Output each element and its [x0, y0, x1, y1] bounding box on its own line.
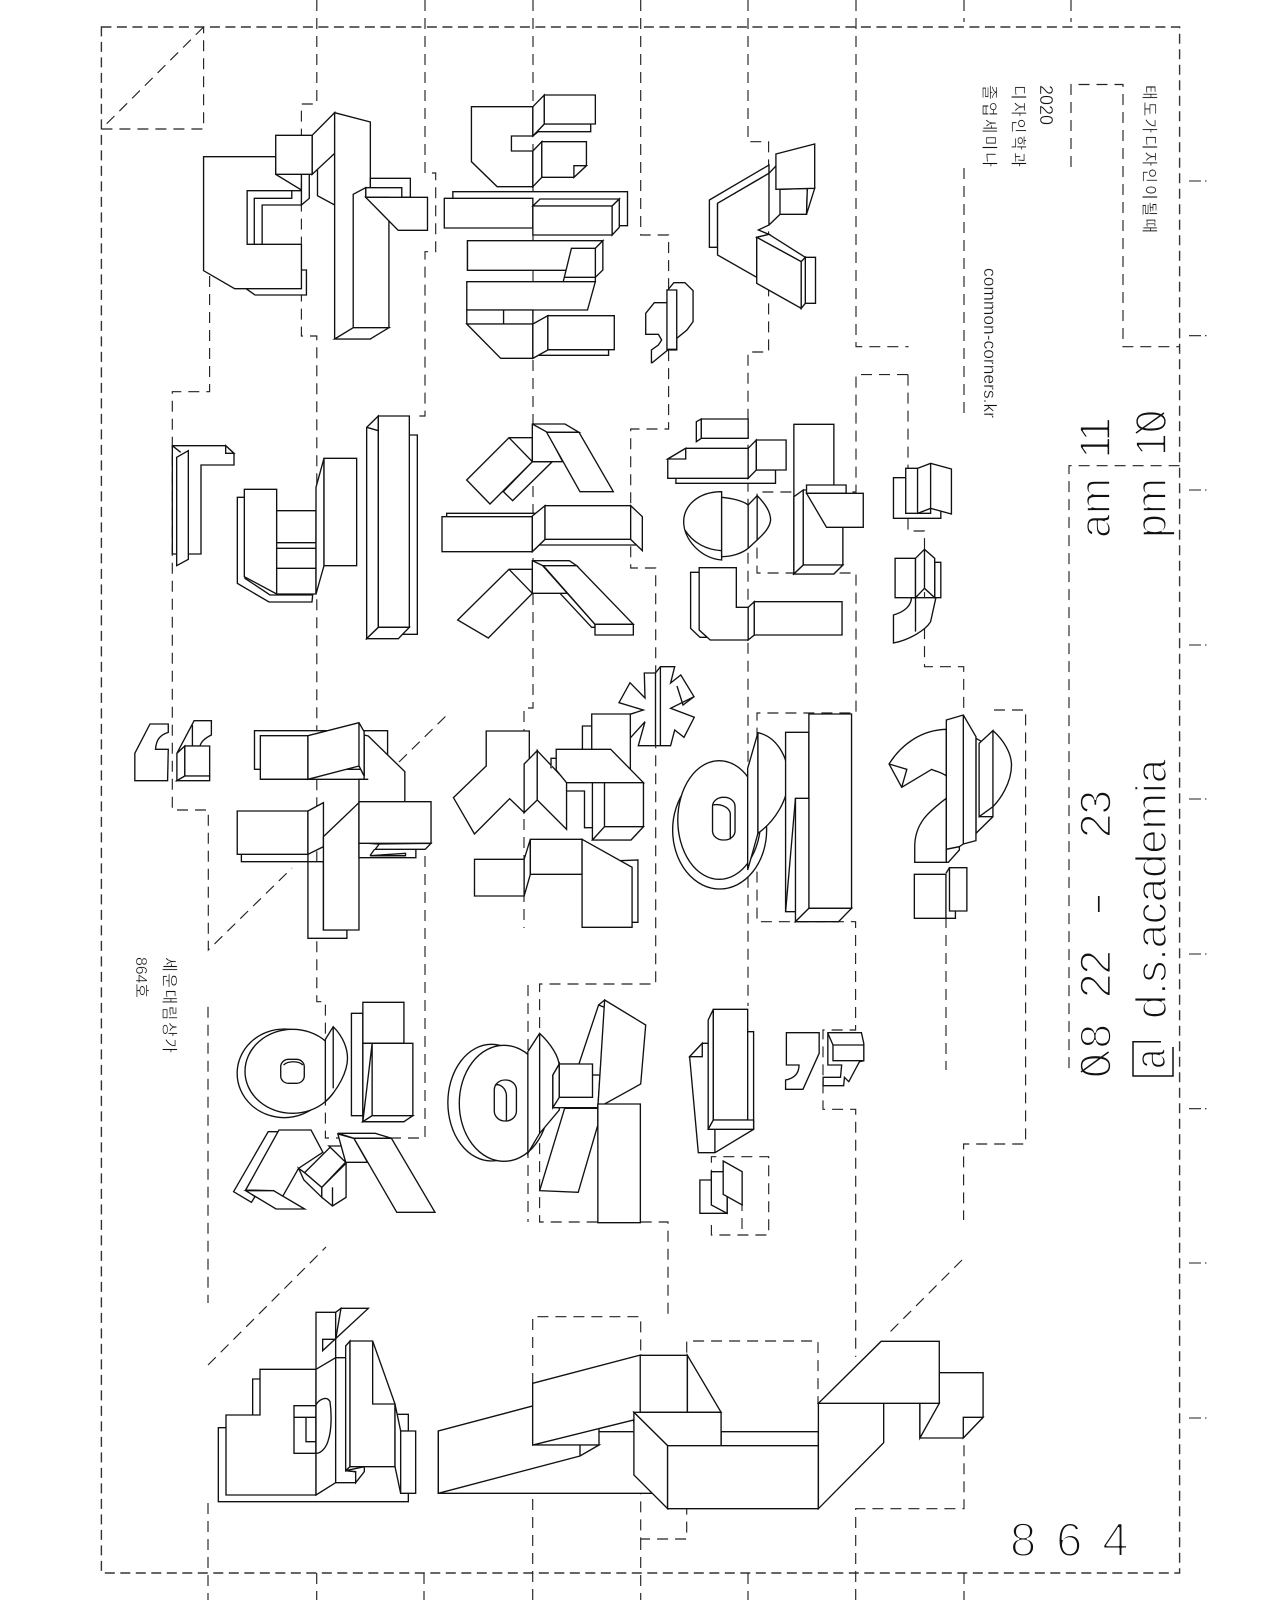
- icon: opening quotation mark: [135, 721, 211, 781]
- lettering row 5: second glyph: [438, 1355, 652, 1493]
- icon: closing quotation mark: [786, 1033, 864, 1089]
- lettering row 1: third glyph: [646, 144, 816, 363]
- lettering row 4: second glyph: [234, 1130, 435, 1212]
- lettering row 2: first glyph: [172, 416, 417, 639]
- icon: asterisk: [619, 667, 694, 746]
- text: exhibition dates: 22: [1072, 950, 1120, 998]
- lettering row 1: first glyph: [204, 113, 427, 339]
- lettering row 2: second glyph: [442, 424, 642, 638]
- lettering row 3: second glyph: [453, 714, 643, 927]
- text: title of the exhibition: 태도가디자인이될때: [1140, 85, 1158, 233]
- text: website: common-corners.kr: [980, 268, 1000, 418]
- lettering row 1: second glyph: [444, 95, 627, 358]
- text: 864: 864: [1010, 1513, 1148, 1566]
- text: exhibition dates: 08: [1072, 1024, 1120, 1078]
- text: exhibition dates: 23: [1072, 790, 1120, 838]
- lettering row 2: third glyph: [668, 419, 863, 640]
- lettering row 2: fourth glyph: [893, 463, 951, 643]
- text: exhibition hours am 11: 1: [1071, 434, 1120, 459]
- text: address: 864호: [132, 957, 149, 998]
- lettering row 4: fourth glyph: [690, 1009, 754, 1213]
- lettering row 3: first glyph: [237, 723, 431, 938]
- lettering row 5: third glyph: [634, 1341, 983, 1509]
- text: address: 세운대림상가: [160, 957, 178, 1053]
- text: exhibition hours am 11: am: [1071, 478, 1120, 538]
- text: year and department: 디자인학과: [1009, 85, 1027, 167]
- lettering row 3: third glyph: [673, 714, 852, 922]
- text: exhibition hours pm 10: pm: [1127, 478, 1176, 538]
- text: exhibition hours pm 10: [1127, 410, 1176, 538]
- text: exhibition dates: [1072, 790, 1120, 1078]
- icon: question mark: [889, 715, 1011, 918]
- text: venue d.s.academia: d.s.academia: [1127, 758, 1176, 1019]
- lettering row 4: first glyph: [237, 1002, 413, 1122]
- text: address: [132, 957, 178, 1053]
- text: exhibition hours am 11: 1: [1071, 417, 1120, 442]
- text: year and department: 2020: [1036, 85, 1056, 125]
- text: exhibition dates: -: [1072, 891, 1120, 917]
- lettering row 5: first glyph: [218, 1308, 416, 1502]
- text: venue d.s.academia: a: [1126, 1049, 1175, 1069]
- text: year and department: [980, 85, 1056, 167]
- lettering row 4: third glyph: [448, 1000, 646, 1223]
- text: year and department: 졸업세미나: [980, 85, 998, 167]
- text: exhibition hours am 11: [1071, 417, 1120, 538]
- text: exhibition hours pm 10: 10: [1127, 410, 1176, 456]
